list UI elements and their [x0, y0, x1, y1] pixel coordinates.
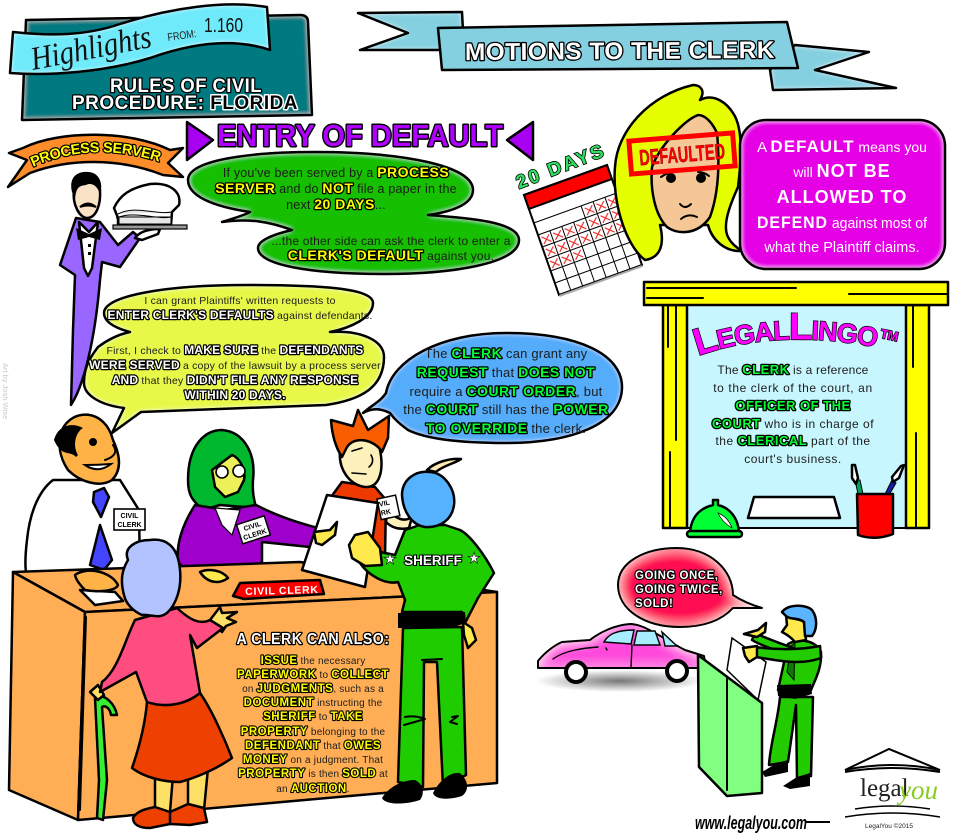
- head: [60, 415, 119, 484]
- bubble text line 4: ...the other side can ask the clerk to enter a: [271, 234, 511, 248]
- process server ribbon: [6, 134, 184, 188]
- lower arm: [755, 646, 821, 662]
- yellow hand on paper: [314, 522, 337, 545]
- pen right: [885, 465, 904, 495]
- legal word: legal: [860, 775, 909, 802]
- magenta box: [740, 120, 945, 269]
- service bell: [687, 500, 742, 537]
- butler process server character: [60, 172, 187, 405]
- glasses: [216, 465, 245, 478]
- definition line 1: The CLERK is a reference: [717, 362, 869, 377]
- banner: motions to the clerk: [358, 12, 896, 90]
- civil clerk sign: CIVIL CLERK: [245, 584, 319, 598]
- bubble text 4: WERE SERVED a copy of the lawsuit by a process server: [89, 358, 381, 372]
- face: [212, 455, 244, 497]
- bubble text 2: ENTER CLERK'S DEFAULTS against defendants.: [108, 308, 372, 322]
- cream arm: [386, 508, 412, 529]
- paper stack: [114, 184, 179, 225]
- bubble text 4: the COURT still has the POWER: [403, 401, 609, 417]
- from label: FROM:: [167, 28, 197, 44]
- bubble text 5: AND that they DIDN'T FILE ANY RESPONSE: [112, 373, 358, 387]
- red shirt: [331, 482, 386, 560]
- car shadow: [535, 670, 705, 692]
- stars: ★: [383, 551, 397, 568]
- civil clerk badge: CIVIL: [243, 521, 263, 533]
- clerk man with red hair: [331, 410, 412, 560]
- legal lingo title: LEGALLINGO: [692, 312, 878, 356]
- legs: [769, 697, 813, 778]
- also text: on JUDGMENTS, such as a: [242, 683, 384, 695]
- auctioneer: [743, 606, 821, 789]
- lower arcs: [845, 806, 940, 817]
- shoes: [762, 760, 810, 789]
- legal lingo window: [642, 280, 950, 539]
- brows nose mouth: [661, 172, 709, 219]
- also text: SHERIFF to TAKE: [263, 711, 363, 723]
- legalyou logo: [845, 749, 940, 830]
- face: [74, 182, 100, 218]
- definition line 4: COURT who is in charge of: [712, 416, 874, 431]
- pen cup: [857, 494, 893, 538]
- pen left: [852, 465, 863, 494]
- raised hand: [744, 623, 766, 637]
- bow tie: [76, 228, 102, 240]
- rule number: 1.160: [204, 15, 243, 37]
- paper held up: [302, 495, 378, 587]
- paper on counter: [748, 497, 840, 518]
- hair: [54, 425, 83, 457]
- left arrow: [187, 122, 213, 160]
- hand on cane: [90, 685, 104, 700]
- tie: [787, 643, 795, 680]
- woman hand: [200, 570, 228, 582]
- defaulted woman: [615, 85, 742, 260]
- explanation line 2: will NOT BE: [792, 161, 891, 181]
- explanation line 4: DEFEND against most of: [757, 213, 928, 232]
- ear and nose line: [105, 445, 115, 460]
- also text: DEFENDANT that OWES: [245, 740, 381, 752]
- white shirt: [25, 480, 140, 590]
- hair: [782, 606, 816, 636]
- cane: [95, 696, 117, 820]
- bubble shape: [84, 285, 384, 433]
- desk: [9, 495, 497, 820]
- bubble shape: [188, 152, 519, 274]
- face: [652, 115, 718, 232]
- calendar: [513, 141, 642, 296]
- head: [402, 472, 454, 527]
- coat: [60, 218, 140, 405]
- partial badge: VIL: [379, 499, 391, 509]
- skirt: [132, 693, 232, 782]
- tie blade: [90, 525, 112, 570]
- stamp: DEFAULTED: [638, 139, 726, 170]
- default explanation box: [740, 120, 945, 269]
- purple body: [178, 505, 318, 590]
- bubble shape: [363, 333, 622, 443]
- civil clerk badge: CIVIL: [121, 513, 139, 520]
- civil clerk badge: [114, 509, 145, 530]
- hair: [71, 172, 101, 200]
- banner title: MOTIONS TO THE CLERK: [465, 37, 775, 66]
- torso: [360, 525, 494, 623]
- bubble text: If you've been served by a PROCESS: [223, 164, 449, 180]
- right tail: [770, 45, 896, 90]
- main banner: [438, 22, 798, 70]
- clerk woman: [178, 430, 318, 590]
- eyes: [666, 173, 706, 183]
- wheels: [566, 661, 687, 682]
- partial badge: [377, 495, 400, 520]
- blue speech bubble: [363, 333, 622, 443]
- header: Highlights rules of civil procedure: [10, 4, 312, 120]
- explanation line 5: what the Plaintiff claims.: [763, 240, 920, 256]
- shoes: [133, 804, 207, 828]
- stamp: [629, 133, 735, 174]
- hair: [331, 410, 389, 457]
- explanation line 3: ALLOWED TO: [777, 187, 907, 207]
- belt: [777, 684, 812, 699]
- mouth: [85, 464, 111, 469]
- yellow speech bubble: [84, 285, 384, 433]
- eye: [89, 438, 97, 446]
- bubble text line 2: SERVER and do NOT file a paper in the: [215, 180, 457, 196]
- civil clerk badge: CLERK: [117, 522, 142, 529]
- left tail: [358, 12, 464, 50]
- moustache: [80, 204, 96, 207]
- sheriff hand: [463, 622, 476, 648]
- artist credit: Art by Josh Wise: [1, 363, 10, 419]
- raised hand: [210, 607, 237, 632]
- bubble text 6: WITHIN 20 DAYS.: [184, 388, 286, 402]
- upper arm: [752, 633, 793, 655]
- clerk can also heading: A CLERK CAN ALSO:: [236, 631, 390, 648]
- auction paper: [727, 638, 766, 700]
- partial badge: RK: [380, 509, 392, 517]
- sheriff label: SHERIFF: [404, 553, 462, 568]
- civil clerk badge: [237, 516, 270, 544]
- belt: [398, 612, 466, 628]
- star right: ★: [467, 550, 481, 567]
- civil clerk sign: [233, 580, 324, 599]
- 20 days label: 20 DAYS: [513, 141, 607, 194]
- shirt: [79, 222, 98, 276]
- also text: [237, 655, 389, 795]
- car windows: [604, 630, 677, 646]
- calendar page: [524, 165, 642, 296]
- green speech bubble: [188, 152, 519, 274]
- auction scene: [535, 548, 821, 796]
- roof: [845, 749, 940, 772]
- sheriff: [349, 459, 494, 804]
- grandmother: [90, 540, 237, 828]
- definition line 6: court's business.: [744, 452, 842, 466]
- window interior: [687, 305, 906, 528]
- bubble text 3: First, I check to MAKE SURE the DEFENDANTS: [107, 343, 363, 357]
- right pillar: [906, 305, 929, 528]
- going twice text: GOING TWICE,: [635, 584, 723, 596]
- bubble text line 3: next 20 DAYS...: [286, 196, 386, 212]
- car details: [553, 645, 632, 667]
- also text: PROPERTY is then SOLD at: [238, 768, 388, 780]
- ribbon label: PROCESS SERVER: [28, 141, 162, 168]
- definition line 3: OFFICER OF THE: [735, 398, 851, 413]
- white glove: [135, 229, 160, 240]
- bubble text 5: TO OVERRIDE the clerk.: [426, 420, 586, 436]
- also text: DOCUMENT instructing the: [244, 697, 383, 709]
- definition line 5: the CLERICAL part of the: [715, 433, 871, 448]
- pink top: [100, 608, 223, 705]
- you word: you: [896, 775, 938, 805]
- tie knot: [93, 488, 109, 517]
- subtitle line 1: RULES OF CIVIL: [110, 76, 262, 97]
- face: [782, 615, 806, 642]
- bubble text 2: REQUEST that DOES NOT: [417, 364, 595, 380]
- explanation text: A DEFAULT means you: [757, 137, 927, 156]
- top beam: [644, 282, 948, 305]
- Highlights script: Highlights: [27, 19, 154, 78]
- teal panel: [22, 15, 312, 120]
- torso: [778, 641, 821, 690]
- clerk hand: [75, 571, 118, 591]
- ribbon shape: [8, 135, 183, 187]
- bubble text 3: require a COURT ORDER, but: [410, 383, 603, 399]
- civil clerk badge: CLERK: [243, 528, 268, 542]
- website handwriting: www.legalyou.com: [695, 813, 807, 833]
- desk top: [13, 562, 497, 612]
- hair: [615, 85, 742, 260]
- clerk man torso: [25, 415, 145, 590]
- also text: PROPERTY belonging to the: [241, 726, 386, 738]
- cream curl: [427, 459, 461, 472]
- tray: [113, 225, 187, 229]
- hair: [188, 430, 256, 510]
- also text: an AUCTION.: [276, 783, 350, 795]
- right arrow: [507, 122, 533, 160]
- hair: [122, 540, 180, 616]
- legs: [155, 768, 208, 812]
- cyan ribbon: [10, 4, 270, 74]
- sold text: SOLD!: [635, 598, 673, 610]
- red speech bubble: [618, 548, 762, 627]
- car body: [538, 624, 706, 668]
- legs: [398, 627, 466, 787]
- also text: PAPERWORK to COLLECT: [237, 669, 389, 681]
- podium: [698, 655, 762, 796]
- bubble text 1: I can grant Plaintiffs' written requests to: [144, 295, 336, 307]
- desk side: [9, 572, 85, 820]
- bubble text line 5: CLERK'S DEFAULT against you.: [288, 247, 494, 263]
- section heading: entry of default: [187, 118, 533, 160]
- shoes: [382, 773, 467, 804]
- left pillar: [663, 305, 687, 528]
- desk front: [78, 592, 497, 820]
- subtitle line 2: PROCEDURE: FLORIDA: [72, 93, 298, 114]
- face: [340, 436, 381, 487]
- also text: ISSUE the necessary: [261, 655, 365, 667]
- paper on desk: [80, 590, 123, 605]
- buttons: [88, 244, 91, 255]
- paper lines: [116, 210, 172, 224]
- definition line 2: to the clerk of the court, an: [713, 381, 873, 395]
- legal lingo title: TM: [880, 328, 900, 342]
- also text: MONEY on a judgment. That: [243, 754, 383, 766]
- yellow hand: [349, 532, 382, 566]
- bubble text 1: The CLERK can grant any: [425, 345, 588, 361]
- white collar: [215, 508, 240, 535]
- facial lines: [352, 448, 373, 474]
- going once text: GOING ONCE,: [635, 570, 718, 582]
- heading text: ENTRY OF DEFAULT: [217, 118, 503, 153]
- copyright: LegalYou ©2015: [865, 822, 913, 830]
- lower hand: [743, 646, 757, 662]
